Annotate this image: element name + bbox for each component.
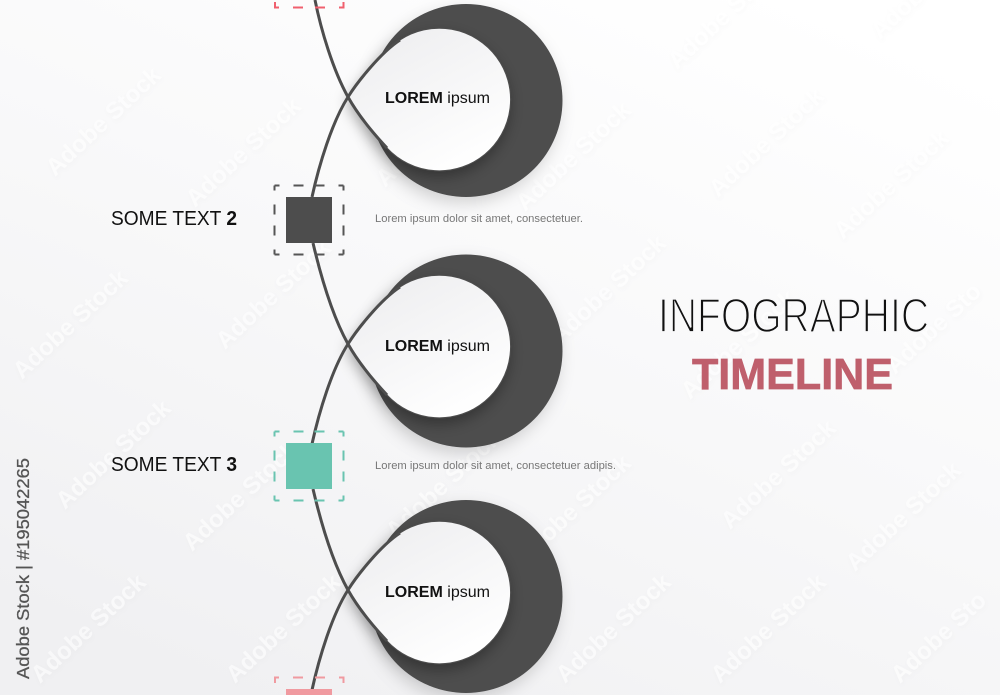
watermarks: Adobe Stock — [51, 394, 177, 514]
watermarks: Adobe Stock — [41, 61, 167, 181]
watermarks: Adobe Stock — [381, 424, 507, 544]
dark circle 3 — [370, 500, 562, 693]
description 3: Lorem ipsum dolor sit amet, consectetuer adipis. — [375, 460, 616, 472]
watermarks: Adobe Stock — [676, 284, 802, 404]
watermarks: Adobe Stock — [26, 568, 152, 688]
teardrop 1 — [348, 28, 511, 171]
title: TIMELINE — [692, 350, 893, 399]
watermarks: Adobe Stock — [511, 96, 637, 216]
watermarks: Adobe Stock — [8, 264, 134, 384]
curve strands 3 — [312, 489, 400, 690]
description 2: Lorem ipsum dolor sit amet, consectetuer. — [375, 213, 583, 225]
watermarks: Adobe Stock — [704, 82, 830, 202]
title: INFOGRAPHIC — [658, 290, 929, 343]
label 2: LOREM ipsum — [385, 338, 490, 355]
watermarks: Adobe Stock — [706, 568, 832, 688]
drop 1 — [312, 0, 562, 197]
watermarks: Adobe Stock — [211, 234, 337, 354]
stock id: Adobe Stock | #195042265 — [13, 458, 33, 679]
marker 1 dashed frame — [275, 2, 344, 8]
curve strands 1 — [312, 0, 400, 197]
step label 2: SOME TEXT 2 — [111, 208, 237, 230]
watermarks: Adobe Stock — [716, 414, 842, 534]
label 3: LOREM ipsum — [385, 584, 490, 601]
watermarks: Adobe Stock — [181, 92, 307, 212]
title — [658, 290, 929, 399]
watermarks: Adobe Stock — [511, 449, 637, 569]
curve strands 2 — [312, 243, 400, 444]
drop 2 — [312, 243, 562, 448]
watermarks: Adobe Stock — [221, 568, 347, 688]
watermarks: Adobe Sto — [881, 278, 987, 379]
marker 2 — [274, 186, 344, 254]
watermarks: Adobe Stock — [546, 229, 672, 349]
watermarks: Adobe Stock — [178, 436, 304, 556]
marker 3 — [274, 432, 344, 500]
step label 3: SOME TEXT 3 — [111, 454, 237, 476]
watermarks: Adobe Stock — [829, 124, 955, 244]
teardrop 3 — [348, 521, 511, 664]
watermarks: Adobe Sto — [886, 587, 992, 688]
watermarks: Adobe Stock — [841, 456, 967, 576]
teardrop 2 — [348, 275, 511, 418]
watermarks: Adobe Stock — [371, 72, 497, 192]
watermarks: Adobe Stock — [551, 568, 677, 688]
marker 4 — [275, 678, 344, 695]
dark circle 1 — [370, 4, 562, 197]
drop 3 — [312, 489, 562, 693]
label 1: LOREM ipsum — [385, 90, 490, 107]
dark circle 2 — [370, 254, 562, 448]
